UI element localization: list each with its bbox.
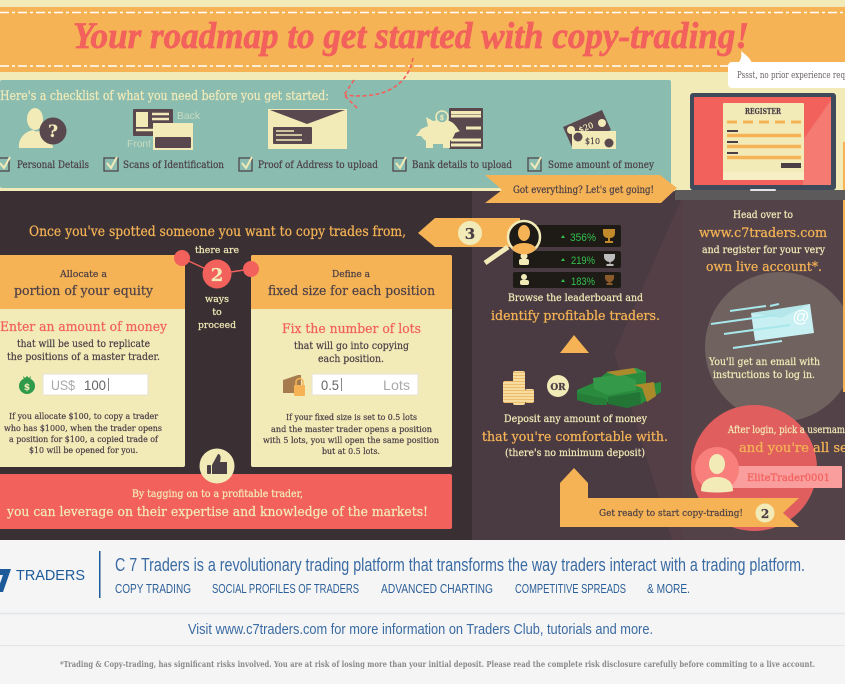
panel: fixed size: Fix the number of lots: [282, 322, 421, 337]
icon: money notes: [563, 110, 616, 149]
input: lots: Lots: [383, 377, 410, 393]
input: amount: [43, 374, 148, 395]
footer: ADVANCED CHARTING: [381, 582, 493, 596]
panel: fixed size: If your fixed size is set to 0.5 lots: [286, 413, 417, 423]
text: head over: own live account*.: [706, 260, 822, 275]
panel: fixed size: but at 0.5 lots.: [322, 447, 380, 457]
callout: no prior experience: [728, 51, 845, 88]
text: head over: www.c7traders.com: [699, 226, 827, 241]
title banner: [0, 7, 845, 72]
panel: allocate equity: [0, 255, 185, 467]
input: lots: [312, 374, 418, 395]
icon: coins: [503, 371, 534, 405]
logo: TRADERS: [16, 567, 85, 584]
icon: flying email: [711, 304, 814, 348]
panel: fixed size: and the master trader opens a position: [271, 425, 432, 435]
footer: COMPETITIVE SPREADS: [515, 582, 626, 596]
checklist items: Personal Details: [17, 160, 89, 171]
footer: [0, 540, 845, 684]
icon: money notes: $10: [585, 137, 600, 147]
text: pick a username: [727, 425, 845, 456]
username input and avatar: EliteTrader0001: [747, 473, 830, 484]
panel: allocate equity: the positions of a master trader.: [7, 352, 160, 363]
panel: dark backgrounds: [0, 142, 845, 540]
logo: [0, 567, 85, 592]
text: head over: and register for your very: [702, 245, 825, 256]
footer: COPY TRADING: [115, 582, 191, 596]
chart: leaderboard: 183%: [571, 276, 595, 288]
icon: money bag: [19, 376, 35, 394]
icon: laptop register screen: REGISTER: [745, 106, 781, 116]
panel: leverage callout: [0, 474, 452, 529]
input: amount: US$: [51, 377, 75, 393]
text: email instructions: You'll get an email with: [708, 357, 821, 368]
panel: leverage callout: By tagging on to a profitable trader,: [132, 489, 303, 500]
text: deposit: [482, 414, 668, 459]
icon: identification scans: Back: [177, 110, 201, 122]
two ways connector: to: [212, 307, 222, 318]
footer: SOCIAL PROFILES OF TRADERS: [212, 582, 359, 596]
panel: fixed size: with 5 lots, you will open the same position: [263, 436, 439, 446]
icon: money bag: $: [24, 383, 30, 393]
text: deposit: that you're comfortable with.: [482, 430, 668, 445]
callout: got everything: [485, 175, 677, 203]
two ways connector: [174, 245, 259, 331]
icon: person with question mark: [19, 108, 66, 148]
text: browse leaderboard: [491, 293, 660, 324]
panel: allocate equity: portion of your equity: [14, 284, 154, 299]
two ways connector: proceed: [198, 320, 236, 331]
icon: magnifying glass trader: [485, 221, 540, 263]
icon: person with question mark: ?: [48, 122, 58, 142]
icon: identification scans: Front: [127, 138, 151, 150]
text: deposit: Deposit any amount of money: [504, 414, 647, 425]
panel: allocate equity: that will be used to replicate: [17, 339, 150, 350]
icon: or badge: [547, 375, 569, 397]
checklist items: Some amount of money: [548, 160, 654, 171]
checklist items: Scans of Identification: [123, 160, 224, 171]
text: browse leaderboard: Browse the leaderboard and: [508, 293, 644, 304]
icon: flying email: @: [792, 307, 810, 326]
panel: allocate equity: If you allocate $100, to copy a trader: [9, 412, 159, 422]
chart: leaderboard: 219%: [571, 255, 595, 267]
two ways connector: there are: [195, 245, 239, 256]
icon: stacks of cash: [577, 368, 661, 408]
panel: leverage callout: you can leverage on their expertise and knowledge of the markets!: [6, 505, 428, 520]
footer: & MORE.: [647, 582, 690, 596]
two ways connector: 2: [211, 265, 223, 286]
arrow: dashed red pointer: [344, 58, 413, 108]
input: amount: 100: [84, 377, 106, 393]
checklist items: Bank details to upload: [412, 160, 513, 171]
icon: money notes: $20: [577, 121, 595, 135]
panel: allocate equity: Enter an amount of money: [0, 320, 168, 335]
arrow: step 3: [418, 218, 520, 247]
checklist items: [0, 157, 654, 171]
username input and avatar: [695, 447, 842, 492]
panel: fixed size: that will go into copying: [294, 341, 410, 352]
arrow: get ready: [560, 468, 799, 527]
text: email instructions: [708, 357, 821, 381]
icon: proof of address envelope: [268, 109, 347, 149]
icon: piggy bank with bank details: $: [440, 114, 444, 122]
arrow: step 3: 3: [465, 225, 475, 243]
icon: thumbs up: [200, 448, 234, 484]
panel: allocate equity: who has $1000, when the trader opens: [4, 424, 162, 434]
icon: locked box: [283, 375, 305, 396]
text: email instructions: instructions to log in.: [713, 370, 815, 381]
panel: checklist: [0, 80, 671, 188]
icon: or badge: OR: [550, 383, 566, 393]
arrow: get ready: Get ready to start copy-trading!: [599, 508, 743, 519]
icon: piggy bank with bank details: [416, 108, 483, 149]
icon: laptop register screen: [675, 93, 845, 200]
arrow: triangle up: [560, 335, 589, 353]
panel: allocate equity: a position for $100, a copied trade of: [9, 435, 159, 445]
panel: allocate equity: Allocate a: [59, 269, 107, 280]
panel: fixed size: each position.: [318, 354, 384, 365]
title banner: Your roadmap to get started with copy-trading!: [73, 16, 749, 57]
text: deposit: (there's no minimum deposit): [505, 448, 645, 459]
checklist items: Proof of Address to upload: [258, 160, 379, 171]
chart: leaderboard: 356%: [570, 232, 596, 244]
heading: once you've spotted: Once you've spotted someone you want to copy trades from,: [29, 224, 406, 240]
input: lots: 0.5: [321, 377, 339, 393]
text: browse leaderboard: identify profitable traders.: [491, 309, 660, 324]
text: head over: Head over to: [733, 210, 793, 221]
two ways connector: ways: [205, 294, 229, 305]
icon: identification scans: [127, 109, 201, 150]
panel: checklist: Here's a checklist of what you need before you get started:: [0, 89, 329, 104]
text: head over: [699, 210, 827, 275]
footer: Visit www.c7traders.com for more information on Traders Club, tutorials and more.: [188, 621, 653, 638]
panel: allocate equity: $10 will be opened for you.: [29, 446, 138, 456]
panel: fixed size: Define a: [332, 269, 370, 280]
arrow: get ready: 2: [761, 507, 769, 521]
panel: fixed size: [251, 255, 452, 467]
panel: fixed size: fixed size for each position: [268, 284, 436, 299]
callout: got everything: Got everything? Let's get going!: [513, 185, 654, 196]
chart: leaderboard: [513, 225, 621, 288]
